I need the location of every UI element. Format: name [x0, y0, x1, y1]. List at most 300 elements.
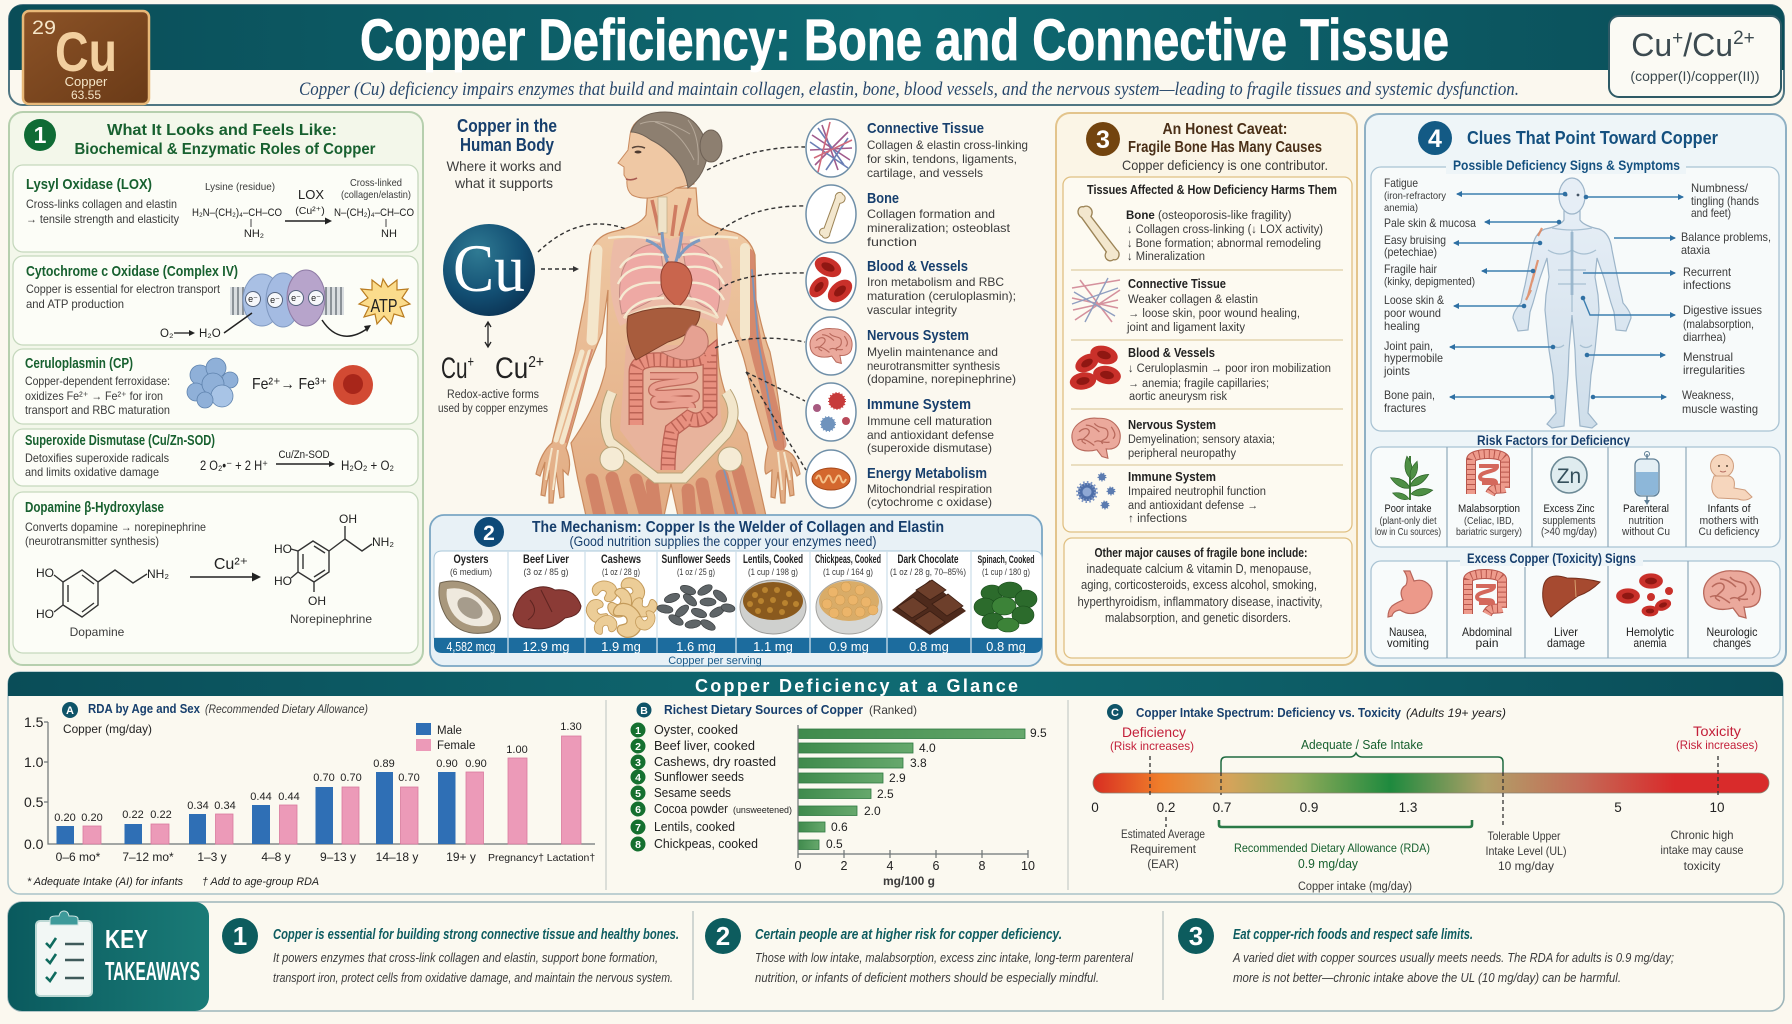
system: bone: Collagen formation and — [867, 207, 995, 221]
left symptom labels: Joint pain, — [1384, 339, 1433, 353]
toxicity: hemolytic anemia: Hemolytic — [1626, 625, 1674, 639]
right symptom labels: Menstrual — [1683, 350, 1733, 364]
chart B bars: 4.0 — [919, 741, 936, 755]
icon: protein complex: e⁻ — [270, 295, 280, 305]
scale labels: 10 — [1709, 800, 1725, 815]
copper sphere: Cu — [453, 230, 525, 306]
chart A bars — [54, 721, 582, 844]
scale labels: 0.7 — [1213, 800, 1231, 815]
UL note — [1486, 829, 1566, 873]
panel 3 heading: Copper deficiency is one contributor. — [1122, 157, 1328, 173]
reaction arrow: H₂O — [199, 328, 221, 340]
UL note: Tolerable Upper — [1488, 829, 1560, 843]
system: nervous system: Nervous System — [867, 327, 969, 344]
panel 2 heading — [532, 519, 944, 549]
chart A age labels: 14–18 y — [376, 850, 418, 864]
symptom arrows — [1450, 194, 1683, 397]
tissue: blood and vessels: aortic aneurysm risk — [1129, 391, 1227, 403]
chart B rank labels — [630, 722, 792, 852]
toxicity: liver damage: Liver — [1554, 625, 1578, 639]
chart B: richest dietary sources — [630, 702, 1047, 888]
card: ceruloplasmin: transport and RBC maturation — [25, 403, 170, 417]
panel 3 heading: An Honest Caveat: — [1162, 121, 1288, 138]
copper element tile: 29 — [32, 18, 56, 39]
chart A axes: 1.0 — [24, 754, 44, 770]
left symptom labels: (iron-refractory — [1384, 190, 1447, 202]
right symptom labels: tingling (hands — [1691, 194, 1759, 208]
card: ceruloplasmin: Ceruloplasmin (CP) — [25, 356, 133, 372]
chart A bars: 0.90 — [436, 758, 458, 770]
chart A bars: 0.34 — [187, 800, 209, 812]
left symptom labels: Bone pain, — [1384, 388, 1435, 402]
chart A bars: 1.30 — [560, 721, 582, 733]
header banner — [9, 5, 1784, 105]
RDA range bracket: Recommended Dietary Allowance (RDA) — [1234, 841, 1430, 855]
icon: protein complex: e⁻ — [248, 294, 258, 304]
UL note: 10 mg/day — [1498, 859, 1554, 873]
adequate range bracket — [1221, 737, 1503, 772]
chemical structure: norepinephrine: NH₂ — [372, 535, 394, 549]
oxidation state box — [1609, 16, 1781, 97]
takeaway 3 — [1178, 918, 1674, 985]
card: lysyl oxidase — [13, 165, 418, 252]
system: immune system — [806, 383, 994, 455]
food: dark chocolate: (1 oz / 28 g, 70–85%) — [890, 567, 966, 578]
food: beef liver: Beef Liver — [523, 554, 569, 566]
toxicity signs grid: Excess Copper (Toxicity) Signs — [1467, 551, 1636, 566]
toxicity: nausea: Nausea, — [1389, 625, 1427, 639]
risk: poor intake: Poor intake — [1384, 503, 1432, 515]
system: nervous system: neurotransmitter synthesis — [867, 359, 1000, 373]
toxicity note: Chronic high — [1670, 828, 1734, 842]
chemical structure: dopamine: HO — [36, 566, 54, 580]
chemical structure: dopamine: Dopamine — [70, 625, 125, 639]
tissues affected box: Tissues Affected & How Deficiency Harms Them — [1087, 183, 1337, 197]
chart B bars: 2.0 — [864, 804, 881, 818]
right symptom labels: Recurrent — [1683, 265, 1732, 279]
chart B bars: 0.5 — [826, 837, 843, 851]
key takeaways label block: TAKEAWAYS — [105, 956, 200, 986]
left symptom labels: fractures — [1384, 401, 1426, 415]
chart A title: (Recommended Dietary Allowance) — [205, 704, 368, 716]
toxicity: hemolytic anemia: anemia — [1634, 636, 1667, 650]
food: beef liver: 12.9 mg — [523, 639, 569, 654]
right symptom labels: ataxia — [1681, 243, 1710, 257]
left symptom labels: Fragile hair — [1384, 262, 1437, 276]
food: sunflower seeds: (1 oz / 25 g) — [677, 567, 715, 578]
glance heading band: Copper Deficiency at a Glance — [695, 676, 1018, 696]
deficiency label: Deficiency — [1122, 724, 1186, 740]
chart B title: (Ranked) — [869, 703, 917, 717]
left symptom labels: poor wound — [1384, 306, 1441, 320]
chart B bars: 2.5 — [877, 787, 894, 801]
chart B rank labels: 1 — [635, 725, 641, 737]
adequate range bracket: Adequate / Safe Intake — [1301, 737, 1423, 752]
neck structures — [652, 197, 690, 236]
tissue: bone: ↓ Collagen cross-linking (↓ LOX activity) — [1127, 224, 1323, 236]
chart B axis: mg/100 g — [883, 874, 935, 888]
chart A axes: 0.5 — [24, 794, 44, 810]
risk: parenteral nutrition: Parenteral — [1623, 503, 1669, 515]
tissue: nervous system — [1072, 418, 1275, 460]
tissue: immune system: Immune System — [1128, 470, 1216, 484]
system: nervous system — [806, 317, 1016, 386]
oxidation state box: Cu — [1631, 27, 1672, 63]
small intestine — [650, 376, 696, 408]
food: spinach: Spinach, Cooked — [978, 554, 1034, 566]
left symptom labels: Pale skin & mucosa — [1384, 216, 1476, 230]
chart B rank labels: Beef liver, cooked — [654, 739, 755, 753]
risk: poor intake: low in Cu sources) — [1375, 527, 1441, 538]
redox forms: Cu — [495, 352, 533, 385]
left symptom labels: Fatigue — [1384, 176, 1418, 190]
card: superoxide dismutase — [13, 429, 418, 486]
icon: red blood cell — [333, 365, 373, 405]
redox forms: + — [468, 354, 474, 371]
diaphragm arc — [624, 306, 718, 318]
chemical structure: norepinephrine: HO — [274, 542, 292, 556]
panel 1 heading: What It Looks and Feels Like: — [107, 122, 337, 139]
takeaway 1: 1 — [233, 921, 247, 951]
panel 3 heading: Fragile Bone Has Many Causes — [1128, 139, 1322, 156]
chart A bars: 0.70 — [398, 772, 420, 784]
icon: protein complex: e⁻ — [291, 293, 301, 303]
risk: parenteral nutrition: nutrition — [1628, 515, 1664, 527]
tissue: blood and vessels: → anemia; fragile capillaries; — [1128, 378, 1269, 390]
chart B axis: 2 — [841, 859, 848, 873]
chemical structure: norepinephrine: OH — [308, 594, 326, 608]
system: blood and vessels: Iron metabolism and RBC — [867, 275, 1004, 289]
dashed connectors — [538, 147, 806, 470]
scale labels: 0.2 — [1157, 800, 1175, 815]
toxicity: abdominal pain: pain — [1476, 636, 1498, 650]
oxidation state box: (copper(I)/copper(II)) — [1630, 68, 1760, 84]
toxicity: neurologic changes — [1704, 571, 1760, 650]
panel: copper deficiency at a glance — [8, 672, 1783, 894]
risk: excess zinc: supplements — [1542, 515, 1596, 527]
heading: copper in the human body: Where it works and — [446, 158, 562, 174]
food: spinach — [974, 554, 1037, 654]
chart A bars: 0.22 — [122, 809, 144, 821]
toxicity: abdominal pain: Abdominal — [1462, 625, 1512, 639]
head and hair — [618, 112, 722, 198]
ribs — [608, 237, 738, 318]
left symptom labels — [1383, 176, 1476, 415]
risk: infants of deficient mothers: Infants of — [1708, 503, 1751, 515]
right symptom labels: Digestive issues — [1683, 303, 1762, 317]
tissue: connective tissue: Weaker collagen & elastin — [1128, 294, 1258, 306]
food: chickpeas: (1 cup / 164 g) — [823, 567, 873, 578]
chart A bars: 1.00 — [506, 744, 528, 756]
other causes box: inadequate calcium & vitamin D, menopause, — [1086, 562, 1312, 576]
anatomical figure — [1513, 178, 1631, 428]
toxicity: nausea — [1387, 571, 1432, 650]
reaction arrow: Cu2+: Cu²⁺ — [214, 556, 248, 573]
toxicity note — [1660, 828, 1744, 873]
copper element tile: Cu — [55, 20, 117, 83]
reaction arrow: Cu2+ — [190, 556, 261, 582]
risk: excess zinc: (>40 mg/day) — [1541, 526, 1597, 538]
card: ceruloplasmin: oxidizes Fe²⁺ → Fe²⁺ for iron — [25, 389, 163, 403]
food: oysters: (6 medium) — [450, 567, 492, 578]
chart A bars: 0.22 — [150, 809, 172, 821]
food: beef liver: (3 oz / 85 g) — [524, 567, 568, 578]
risk: parenteral nutrition: without Cu — [1621, 526, 1670, 538]
chemical structure: norepinephrine: HO — [274, 574, 292, 588]
system: energy metabolism: Mitochondrial respiration — [867, 482, 992, 496]
right symptom labels: muscle wasting — [1682, 402, 1758, 416]
chart A bars: 0.34 — [214, 800, 236, 812]
left symptom labels: Loose skin & — [1384, 293, 1444, 307]
system: bone: mineralization; osteoblast — [867, 221, 1011, 235]
card: lysyl oxidase: Cross-links collagen and elastin — [26, 197, 177, 211]
card: cytochrome c oxidase: Copper is essential for electron transport — [26, 282, 221, 296]
takeaway 1: It powers enzymes that cross-link collagen and elastin, support bone formation, — [273, 951, 658, 965]
redox forms: used by copper enzymes — [438, 403, 548, 415]
right symptom labels: Weakness, — [1682, 388, 1734, 402]
badge 4: 4 — [1428, 125, 1442, 153]
key takeaways strip — [8, 902, 1784, 1011]
system: connective tissue: for skin, tendons, ligaments, — [867, 152, 1017, 166]
chart A age labels: 4–8 y — [261, 850, 291, 864]
system: blood and vessels: maturation (ceruloplasmin); — [867, 289, 1016, 303]
tissue: nervous system: Demyelination; sensory ataxia; — [1128, 434, 1275, 446]
chart B rank labels: Cashews, dry roasted — [654, 755, 776, 769]
chart A legend: Male — [437, 725, 462, 737]
redox forms — [438, 352, 548, 415]
takeaway 2: nutrition, or infants of deficient mothers should be especially mindful. — [755, 971, 1099, 985]
card: superoxide dismutase: Cu/Zn-SOD — [278, 449, 330, 461]
chart B bars — [798, 726, 1047, 851]
chart A age labels: 0–6 mo* — [56, 850, 101, 864]
food: spinach: (1 cup / 180 g) — [982, 567, 1030, 578]
panel 4 heading: Clues That Point Toward Copper — [1467, 128, 1718, 148]
signs and symptoms box — [1371, 157, 1779, 431]
toxicity: liver damage — [1543, 576, 1600, 650]
heading: copper in the human body — [446, 116, 562, 191]
card: ceruloplasmin: Copper-dependent ferroxidase: — [25, 374, 170, 388]
scale labels — [1091, 800, 1725, 815]
EAR note: Estimated Average — [1121, 829, 1205, 841]
RDA range bracket — [1219, 820, 1472, 871]
badge 1 — [24, 119, 56, 151]
panel 2 heading: The Mechanism: Copper Is the Welder of Collagen and Elastin — [532, 519, 944, 536]
deficiency label — [1110, 724, 1194, 753]
copper element tile: 63.55 — [71, 88, 101, 102]
icon: ATP burst: ATP — [370, 296, 398, 316]
chart B rank labels: 4 — [635, 772, 641, 784]
risk: parenteral nutrition — [1621, 452, 1670, 538]
lungs — [620, 244, 720, 314]
risk: malabsorption — [1456, 454, 1522, 538]
tissue: blood and vessels — [1068, 343, 1331, 403]
card: lysyl oxidase: (collagen/elastin) — [341, 189, 411, 201]
card: ceruloplasmin — [13, 349, 418, 424]
spectrum bar — [1093, 773, 1769, 793]
food: lentils: 1.1 mg — [753, 639, 793, 654]
panel 2: mechanism and food sources — [430, 515, 1042, 667]
chart B axis: 4 — [887, 859, 894, 873]
chart B bars: 9.5 — [1030, 726, 1047, 740]
takeaway 2 — [705, 918, 1134, 985]
scale labels: 0.9 — [1300, 800, 1318, 815]
toxicity label: (Risk increases) — [1676, 738, 1758, 752]
great vessels — [646, 232, 700, 272]
food: oysters: 4,582 mcg — [446, 639, 496, 654]
toxicity: nausea: vomiting — [1387, 636, 1429, 650]
toxicity label: Toxicity — [1693, 723, 1741, 739]
pelvis — [605, 392, 733, 478]
chemical structure: norepinephrine — [274, 512, 394, 626]
chart C title: Copper Intake Spectrum: Deficiency vs. Toxicity — [1136, 706, 1401, 720]
food: cashews — [583, 554, 660, 654]
tissue: bone: ↓ Bone formation; abnormal remodeling — [1127, 238, 1321, 250]
chart B rank labels: Chickpeas, cooked — [654, 837, 758, 851]
system: bone: Bone — [867, 190, 899, 207]
hand bones — [546, 448, 790, 490]
other causes box: hyperthyroidism, inflammatory disease, inactivity, — [1078, 595, 1322, 609]
chart A age labels: 19+ y — [446, 850, 476, 864]
large intestine — [636, 354, 710, 470]
RDA range bracket: 0.9 mg/day — [1298, 857, 1359, 871]
subtitle: Copper (Cu) deficiency impairs enzymes that build and maintain collagen, elastin, bone, blood vessels, and the nervous system—leading to fragile tissues and systemic dysfunction. — [299, 80, 1519, 100]
badge 2 — [474, 517, 504, 547]
chart A bars: 0.70 — [340, 772, 362, 784]
title: Copper Deficiency: Bone and Connective Tissue — [360, 8, 1449, 73]
food: lentils: Lentils, Cooked — [743, 554, 803, 566]
risk: malabsorption: Malabsorption — [1458, 503, 1520, 515]
chart B title: B — [640, 705, 648, 717]
panel 1: biochemical roles — [9, 112, 423, 665]
chart B rank labels: 3 — [635, 757, 641, 769]
system: immune system: Immune System — [867, 396, 971, 413]
icon: protein complex — [230, 270, 344, 327]
left symptom labels: joints — [1383, 364, 1410, 378]
tissue: bone: ↓ Mineralization — [1127, 251, 1205, 263]
system: connective tissue — [806, 119, 1028, 180]
card: cytochrome c oxidase: Cytochrome c Oxidase (Complex IV) — [26, 263, 238, 280]
deficiency label: (Risk increases) — [1110, 739, 1194, 753]
signs and symptoms box: Possible Deficiency Signs & Symptoms — [1453, 157, 1680, 173]
chart C title — [1107, 704, 1506, 720]
chemical structure: dopamine: HO — [36, 607, 54, 621]
card: lysyl oxidase: N–(CH₂)₄–CH–CO — [334, 207, 414, 219]
EAR note: Requirement — [1130, 844, 1197, 856]
tissue: immune system: and antioxidant defense → — [1128, 500, 1258, 512]
food: oysters: Oysters — [454, 554, 488, 566]
toxicity note: intake may cause — [1660, 843, 1744, 857]
badge 3: 3 — [1096, 126, 1110, 154]
copper element tile — [23, 11, 149, 104]
toxicity: liver damage: damage — [1547, 636, 1585, 650]
abdomen base — [620, 345, 722, 470]
chart B rank labels: Lentils, cooked — [654, 820, 735, 834]
tissue: bone: Bone (osteoporosis-like fragility) — [1126, 210, 1292, 222]
risk: malabsorption: (Celiac, IBD, — [1464, 516, 1514, 527]
tissue: connective tissue: Connective Tissue — [1128, 277, 1226, 291]
tissue: connective tissue — [1072, 277, 1300, 334]
scale labels: 5 — [1614, 800, 1622, 815]
other causes box — [1064, 538, 1352, 658]
chart B bars: 0.6 — [831, 820, 848, 834]
left symptom labels: healing — [1384, 319, 1420, 333]
oxidation state box: + — [1672, 28, 1683, 49]
toxicity label — [1676, 723, 1758, 752]
toxicity: hemolytic anemia — [1616, 573, 1674, 650]
risk: excess zinc: Excess Zinc — [1544, 503, 1595, 515]
card: superoxide dismutase: Superoxide Dismutase (Cu/Zn-SOD) — [25, 433, 215, 449]
risk: poor intake — [1375, 456, 1441, 538]
card: lysyl oxidase: → tensile strength and elasticity — [26, 212, 179, 226]
icon: clipboard checklist — [36, 911, 92, 996]
takeaway 3: 3 — [1189, 921, 1203, 951]
card: cytochrome c oxidase: and ATP production — [26, 297, 124, 311]
liver — [627, 308, 700, 360]
right symptom labels: Balance problems, — [1681, 230, 1771, 244]
food: lentils: (1 cup / 198 g) — [748, 567, 798, 578]
takeaway 2: Certain people are at higher risk for copper deficiency. — [755, 927, 1062, 943]
card: lysyl oxidase: LOX — [298, 187, 324, 202]
system: bone: function — [867, 235, 917, 249]
risk: excess zinc — [1541, 457, 1597, 538]
system: nervous system: Myelin maintenance and — [867, 345, 998, 359]
badge 3 — [1086, 122, 1120, 156]
system: nervous system: (dopamine, norepinephrine) — [867, 372, 1016, 386]
tissue: blood and vessels: Blood & Vessels — [1128, 346, 1215, 360]
left symptom labels: (petechiae) — [1384, 245, 1437, 259]
chart A axes: 0.0 — [24, 836, 44, 852]
right symptom labels: infections — [1683, 278, 1731, 292]
axis caption: Copper intake (mg/day) — [1298, 881, 1412, 893]
takeaway 1: Copper is essential for building strong connective tissue and healthy bones. — [273, 927, 679, 943]
risk: malabsorption: bariatric surgery) — [1456, 527, 1522, 538]
glance heading band — [8, 672, 1783, 696]
toxicity: neurologic changes: changes — [1713, 636, 1751, 650]
chart C: intake spectrum — [1091, 704, 1769, 893]
arrow: redox exchange — [485, 322, 491, 347]
panel 3 heading — [1122, 121, 1328, 173]
card: lysyl oxidase: Lysyl Oxidase (LOX) — [26, 176, 152, 193]
chart B rank labels: Sesame seeds — [654, 786, 731, 800]
system: connective tissue: Connective Tissue — [867, 120, 984, 137]
right symptom labels — [1681, 181, 1771, 416]
system: energy metabolism: Energy Metabolism — [867, 465, 987, 482]
chart A axes: Copper (mg/day) — [63, 722, 152, 736]
chart B rank labels: 5 — [635, 788, 641, 800]
other causes box: Other major causes of fragile bone include: — [1094, 546, 1308, 560]
food: dark chocolate: Dark Chocolate — [898, 554, 958, 566]
chart B bars: 3.8 — [910, 756, 927, 770]
risk: infants of deficient mothers: Cu deficiency — [1698, 526, 1760, 538]
heading: copper in the human body: Copper in the — [457, 116, 557, 136]
risk: infants of deficient mothers — [1698, 454, 1760, 538]
chart A title: A — [66, 705, 74, 717]
oxidation state box: /Cu — [1683, 27, 1733, 63]
food: chickpeas — [815, 554, 882, 654]
system: blood and vessels: vascular integrity — [867, 303, 957, 317]
chart C title: (Adults 19+ years) — [1406, 706, 1506, 720]
panel 1 heading: Biochemical & Enzymatic Roles of Copper — [74, 141, 376, 158]
chart A footnotes: † Add to age-group RDA — [202, 876, 319, 888]
chart A bars: 0.44 — [278, 791, 300, 803]
chemical structure: dopamine — [36, 566, 169, 639]
system: energy metabolism — [806, 450, 992, 509]
food: cashews: (1 oz / 28 g) — [602, 567, 640, 578]
chart B axis: 8 — [979, 859, 986, 873]
ribcage base — [610, 236, 732, 326]
system: immune system: Immune cell maturation — [867, 414, 992, 428]
food: beef liver — [513, 554, 581, 654]
